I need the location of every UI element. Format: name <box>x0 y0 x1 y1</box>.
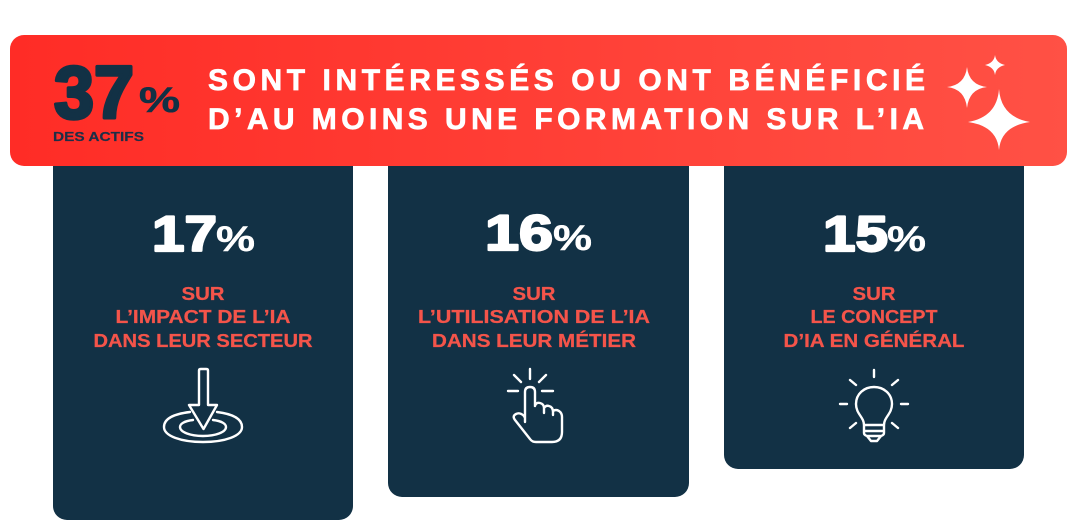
icon: pointing hand <box>508 369 562 442</box>
panel: card 1 <box>53 140 353 520</box>
stat: 16%: 16 <box>485 205 553 261</box>
stat: 15% <box>823 206 926 262</box>
panel: card 2 <box>388 140 689 497</box>
text: card 3 description: SUR <box>852 284 896 304</box>
icon: light bulb <box>840 370 908 441</box>
banner <box>10 35 1067 166</box>
text: card 2 description: DANS LEUR MÉTIER <box>432 330 636 351</box>
text: card 2 description <box>418 284 650 351</box>
text: card 2 description: SUR <box>512 284 556 304</box>
stat: 16%: % <box>553 219 592 258</box>
stat: 37% des actifs: 37 <box>54 51 134 134</box>
text: card 1 description: L’IMPACT DE L’IA <box>116 307 290 327</box>
text: card 3 description: D’IA EN GÉNÉRAL <box>784 330 965 351</box>
stat: 37% des actifs: DES ACTIFS <box>53 129 144 144</box>
text: card 1 description <box>94 284 312 351</box>
text: card 1 description: DANS LEUR SECTEUR <box>94 331 312 351</box>
stat: 15%: 15 <box>823 206 888 262</box>
heading <box>208 63 925 136</box>
stat: 17%: 17 <box>152 206 217 262</box>
stat: 17% <box>152 206 255 262</box>
heading: D’AU MOINS UNE FORMATION SUR L’IA <box>208 103 924 136</box>
stat: 37% des actifs <box>53 51 180 144</box>
text: card 3 description: LE CONCEPT <box>810 307 938 327</box>
text: card 1 description: SUR <box>182 284 224 304</box>
stat: 17%: % <box>216 220 255 259</box>
stat: 16% <box>485 205 592 261</box>
icon: arrow on target <box>164 369 242 442</box>
text: card 2 description: L’UTILISATION DE L’IA <box>418 307 650 327</box>
heading: SONT INTÉRESSÉS OU ONT BÉNÉFICIÉ <box>208 63 925 97</box>
text: card 3 description <box>784 284 965 351</box>
stat: 15%: % <box>887 220 926 259</box>
stat: 37% des actifs: % <box>139 81 180 120</box>
icon: sparkles <box>947 55 1030 150</box>
panel: card 3 <box>724 140 1024 469</box>
